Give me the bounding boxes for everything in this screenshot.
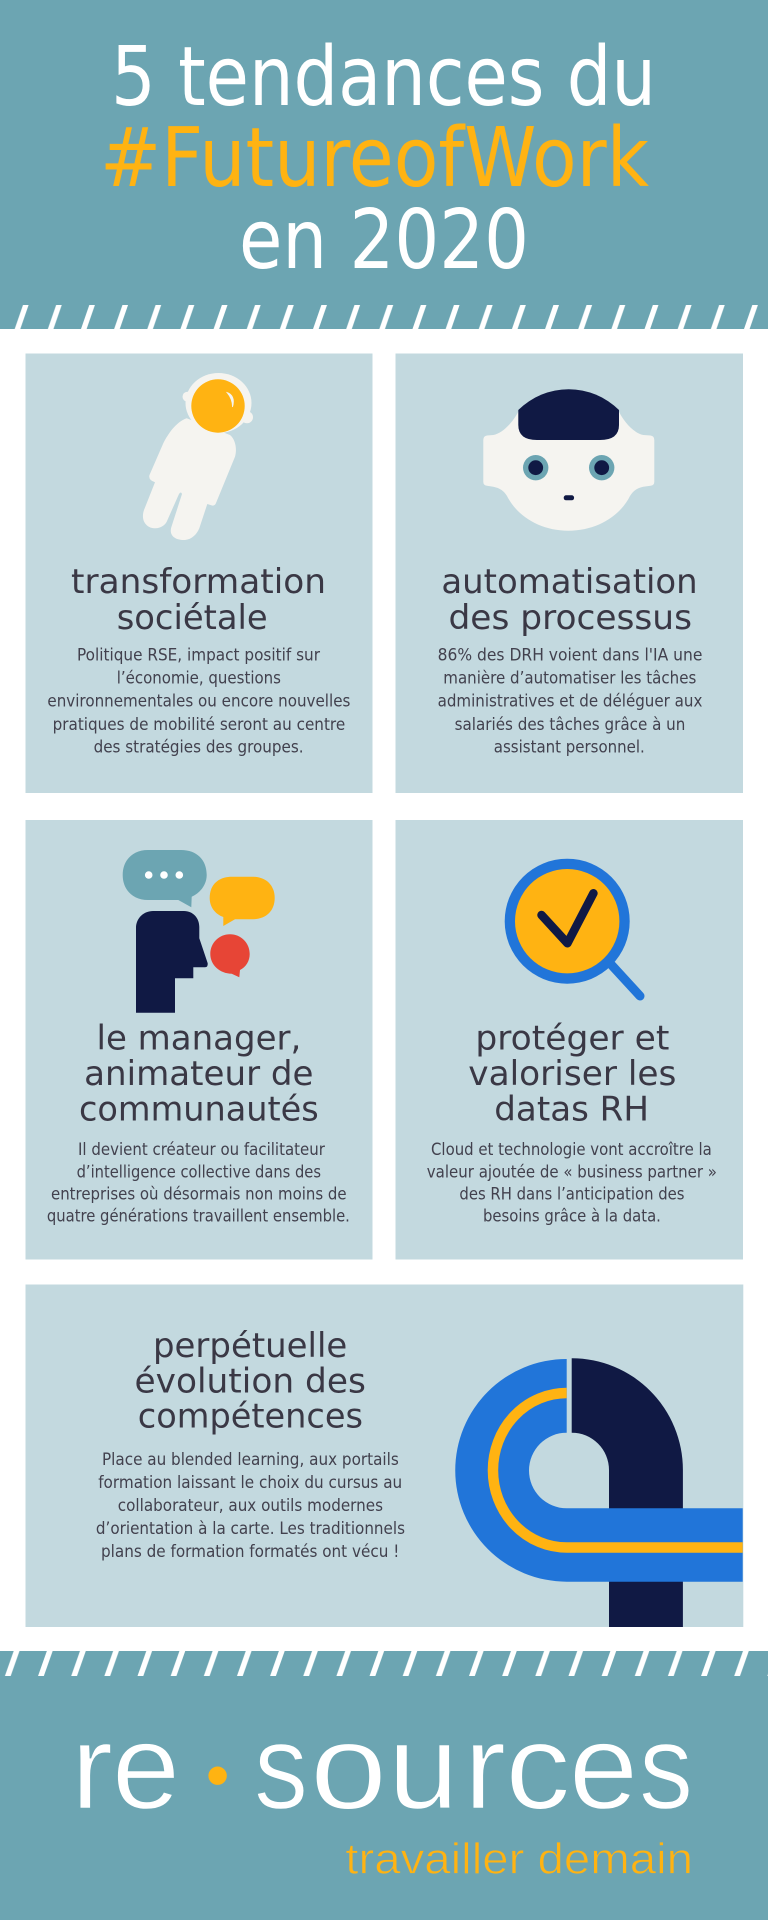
body text: entreprises où désormais non moins de [51, 1184, 347, 1203]
body text: Il devient créateur ou facilitateur [78, 1140, 325, 1159]
logo: re·sources: e [569, 1698, 638, 1834]
logo: re·sources [71, 1698, 693, 1834]
body text: Place au blended learning, aux portails [102, 1450, 399, 1469]
logo: re·sources: o [310, 1698, 387, 1834]
body text: quatre générations travaillent ensemble. [47, 1207, 350, 1226]
footer band [0, 1651, 768, 1920]
heading: perpétuelle [153, 1326, 347, 1366]
logo: re·sources: r [464, 1698, 506, 1834]
body text [47, 1140, 350, 1226]
body text: formation laissant le choix du cursus au [98, 1473, 402, 1492]
body text: 86% des DRH voient dans l'IA une [438, 646, 702, 665]
heading [134, 1326, 366, 1437]
panel: transformation sociétale [26, 354, 372, 793]
logo: re·sources: s [639, 1698, 693, 1834]
body text [47, 646, 350, 757]
body text [438, 646, 703, 757]
tagline: travailler demain [345, 1834, 693, 1883]
title: #FutureofWork [100, 111, 649, 206]
icon: knot of ribbons [455, 1358, 743, 1627]
body text: collaborateur, aux outils modernes [118, 1496, 383, 1515]
panel: perpétuelle évolution des compétences [26, 1284, 743, 1627]
heading [71, 562, 326, 638]
title: 5 tendances du [111, 30, 656, 125]
icon: robot head [483, 389, 654, 531]
heading: datas RH [494, 1090, 649, 1130]
body text: environnementales ou encore nouvelles [47, 692, 350, 711]
logo: re·sources: u [388, 1698, 459, 1834]
heading [441, 562, 698, 638]
icon: magnifying glass with check mark [505, 859, 640, 996]
body text: pratiques de mobilité seront au centre [53, 715, 345, 734]
heading: communautés [79, 1090, 319, 1130]
icon: astronaut [143, 373, 253, 540]
heading [468, 1019, 676, 1130]
logo: re·sources: c [505, 1698, 570, 1834]
body text: des RH dans l’anticipation des [459, 1184, 684, 1203]
heading: valoriser les [468, 1054, 676, 1094]
heading: protéger et [475, 1019, 669, 1059]
logo: re·sources: e [112, 1698, 180, 1834]
body text: d’orientation à la carte. Les traditionnels [96, 1519, 405, 1538]
title: en 2020 [239, 193, 529, 288]
logo: re·sources: s [254, 1698, 308, 1834]
heading: évolution des [134, 1362, 366, 1402]
logo: re·sources: r [71, 1698, 113, 1834]
body text: plans de formation formatés ont vécu ! [101, 1542, 399, 1561]
body text: Politique RSE, impact positif sur [77, 646, 320, 665]
panel: automatisation des processus [396, 354, 743, 793]
body text: d’intelligence collective dans des [77, 1162, 321, 1181]
panel: protéger et valoriser les datas RH [396, 820, 743, 1260]
heading: des processus [448, 598, 692, 638]
heading: sociétale [117, 598, 268, 638]
heading: le manager, [96, 1019, 301, 1059]
title [100, 30, 656, 288]
icon: person with speech bubbles [123, 850, 275, 1013]
heading: compétences [138, 1397, 363, 1437]
body text [427, 1140, 717, 1226]
body text [96, 1450, 405, 1561]
heading [79, 1019, 319, 1130]
header band [0, 0, 768, 329]
body text: valeur ajoutée de « business partner » [427, 1162, 717, 1181]
body text: manière d’automatiser les tâches [443, 669, 696, 688]
body text: assistant personnel. [494, 738, 645, 757]
body text: administratives et de déléguer aux [438, 692, 703, 711]
body text: besoins grâce à la data. [483, 1207, 661, 1226]
body text: des stratégies des groupes. [94, 738, 304, 757]
body text: Cloud et technologie vont accroître la [431, 1140, 712, 1159]
body text: l’économie, questions [117, 669, 281, 688]
body text: salariés des tâches grâce à un [455, 715, 685, 734]
panel: le manager, animateur de communautés [26, 820, 372, 1260]
heading: transformation [71, 562, 326, 602]
heading: automatisation [441, 562, 698, 602]
heading: animateur de [84, 1054, 314, 1094]
